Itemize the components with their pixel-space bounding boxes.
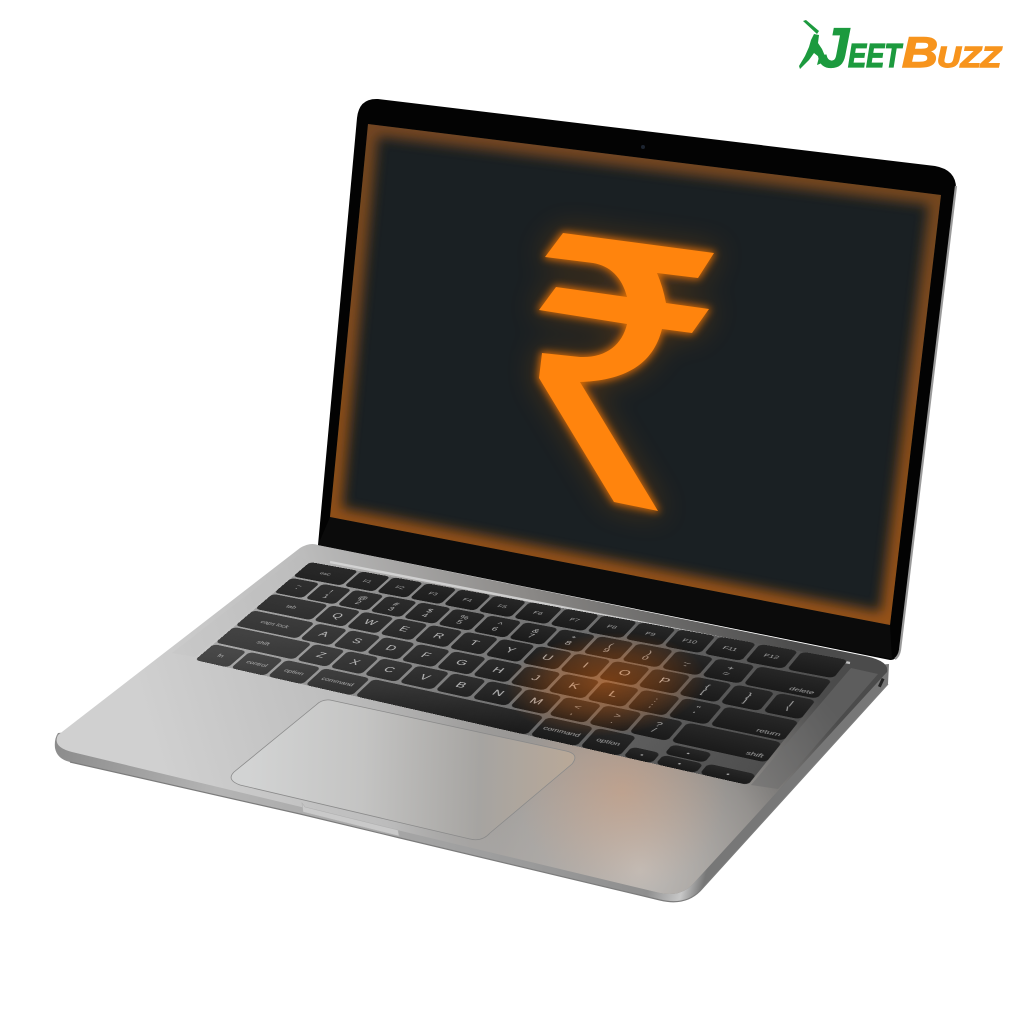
QWERTY key row: Q xyxy=(329,612,346,620)
home key row: ' xyxy=(689,711,696,717)
number key row: delete xyxy=(788,686,816,695)
number key row: 0 xyxy=(640,654,651,661)
keyboard xyxy=(195,562,848,785)
function key row: F1 xyxy=(361,579,373,584)
number key row: ) xyxy=(646,650,654,656)
home key row: " xyxy=(693,705,702,712)
icon: cricket batter xyxy=(799,20,825,69)
left speaker strip xyxy=(172,556,308,657)
shift key row: N xyxy=(489,688,507,698)
number key row: 8 xyxy=(563,640,574,646)
shift key row: shift xyxy=(255,640,272,646)
number key row: 1 xyxy=(321,593,331,599)
QWERTY key row: T xyxy=(466,639,482,647)
camera xyxy=(641,145,645,149)
number key row: ` xyxy=(290,587,299,593)
function key row: F2 xyxy=(394,585,406,590)
trackpad xyxy=(231,700,575,840)
home key row: return xyxy=(755,727,783,737)
function key row: F11 xyxy=(721,645,739,652)
logo wordmark: UZZ xyxy=(937,42,1002,74)
number key row: = xyxy=(721,670,732,677)
number key row: 3 xyxy=(386,606,396,612)
QWERTY key row: [ xyxy=(699,689,707,695)
shift key row: . xyxy=(608,718,617,725)
QWERTY key row: } xyxy=(745,692,754,698)
number key row: 2 xyxy=(353,599,363,605)
home key row: F xyxy=(418,651,434,660)
QWERTY key row: Y xyxy=(502,646,518,655)
modifier key row: command xyxy=(320,676,356,687)
QWERTY key row: { xyxy=(703,683,712,690)
logo wordmark: B xyxy=(902,29,938,77)
shift key row: V xyxy=(416,673,433,682)
number key row: $ xyxy=(425,608,435,614)
function key row xyxy=(294,562,846,678)
shift key row: < xyxy=(572,704,583,711)
laptop lid xyxy=(318,99,956,660)
modifier key row: fn xyxy=(216,653,226,658)
base front edge xyxy=(55,664,889,902)
number key row: _ xyxy=(684,657,695,664)
function key row: F9 xyxy=(644,631,657,637)
number key row: & xyxy=(530,628,542,634)
QWERTY key row: tab xyxy=(285,604,298,610)
logo wordmark xyxy=(818,16,1002,79)
QWERTY key row: R xyxy=(430,632,447,640)
modifier key row: • xyxy=(676,761,683,767)
side port xyxy=(878,678,885,687)
laptop body illustration xyxy=(54,99,958,902)
number key row xyxy=(276,578,830,698)
home key row: caps lock xyxy=(259,619,291,629)
QWERTY key row xyxy=(256,594,814,718)
home key row: S xyxy=(349,637,365,645)
thumb notch xyxy=(302,803,399,836)
logo wordmark: EET xyxy=(848,37,903,74)
number key row: - xyxy=(681,662,690,669)
home key row: ; xyxy=(647,702,655,709)
shift key row: / xyxy=(650,727,658,734)
home key row: G xyxy=(453,658,470,667)
number key row: 4 xyxy=(420,612,430,618)
shift key row: shift xyxy=(744,750,765,759)
QWERTY key row: U xyxy=(539,653,556,662)
modifier key row xyxy=(196,644,755,784)
function key row: F3 xyxy=(427,591,439,596)
modifier key row: command xyxy=(542,725,582,738)
home key row: H xyxy=(490,665,507,675)
keyboard top highlight xyxy=(330,562,850,663)
QWERTY key row: ] xyxy=(741,697,749,704)
function key row: F4 xyxy=(461,597,474,603)
function key row: F6 xyxy=(532,610,544,616)
function key row: F7 xyxy=(568,617,581,623)
QWERTY key row: \ xyxy=(783,705,791,712)
home key row: A xyxy=(316,630,332,638)
shift key row xyxy=(217,628,780,762)
keyboard light overlay xyxy=(195,562,848,785)
modifier key row: control xyxy=(245,659,269,668)
number key row: @ xyxy=(356,595,370,601)
function key row: F12 xyxy=(762,653,781,660)
modifier key row: • xyxy=(724,771,732,777)
QWERTY key row: P xyxy=(656,676,673,686)
number key row: # xyxy=(391,601,401,607)
shift key row: X xyxy=(347,658,363,667)
rupee symbol xyxy=(539,233,714,511)
shift key row: Z xyxy=(313,651,328,660)
number key row: ( xyxy=(607,642,615,648)
shift key row: B xyxy=(453,681,469,690)
home key row: J xyxy=(529,673,543,682)
home key row: L xyxy=(606,689,621,699)
modifier key row: • xyxy=(638,752,646,758)
QWERTY key row: | xyxy=(788,700,796,707)
shift key row: C xyxy=(381,665,398,675)
number key row: 7 xyxy=(526,633,537,639)
number key row: 9 xyxy=(601,647,612,654)
function key row: F10 xyxy=(681,638,699,645)
shift key row: M xyxy=(527,696,546,707)
modifier key row: • xyxy=(685,750,692,756)
screen xyxy=(330,124,941,625)
function key row: F5 xyxy=(496,604,509,609)
home key row: : xyxy=(652,697,660,703)
modifier key row: option xyxy=(282,668,306,676)
number key row: ! xyxy=(327,589,335,594)
number key row: 5 xyxy=(454,619,465,625)
number key row: ^ xyxy=(495,621,505,627)
number key row: + xyxy=(725,665,736,672)
function key row: esc xyxy=(318,571,333,576)
function key row: F8 xyxy=(605,624,619,630)
number key row: * xyxy=(568,635,578,641)
right speaker grille xyxy=(751,668,878,789)
modifier key row: option xyxy=(595,737,622,747)
number key row: % xyxy=(458,614,471,621)
logo wordmark: J xyxy=(818,16,851,79)
number key row: 6 xyxy=(490,626,500,632)
home key row xyxy=(237,611,798,740)
QWERTY key row: W xyxy=(361,618,380,627)
QWERTY key row: E xyxy=(396,625,412,633)
QWERTY key row: I xyxy=(580,661,591,669)
base deck surface xyxy=(57,544,900,910)
shift key row: > xyxy=(612,712,623,719)
shift key row: , xyxy=(568,709,577,716)
home key row: D xyxy=(383,644,399,653)
QWERTY key row: O xyxy=(615,668,633,678)
home key row: K xyxy=(566,681,582,691)
number key row: ~ xyxy=(294,583,305,589)
shift key row: ? xyxy=(653,721,664,728)
